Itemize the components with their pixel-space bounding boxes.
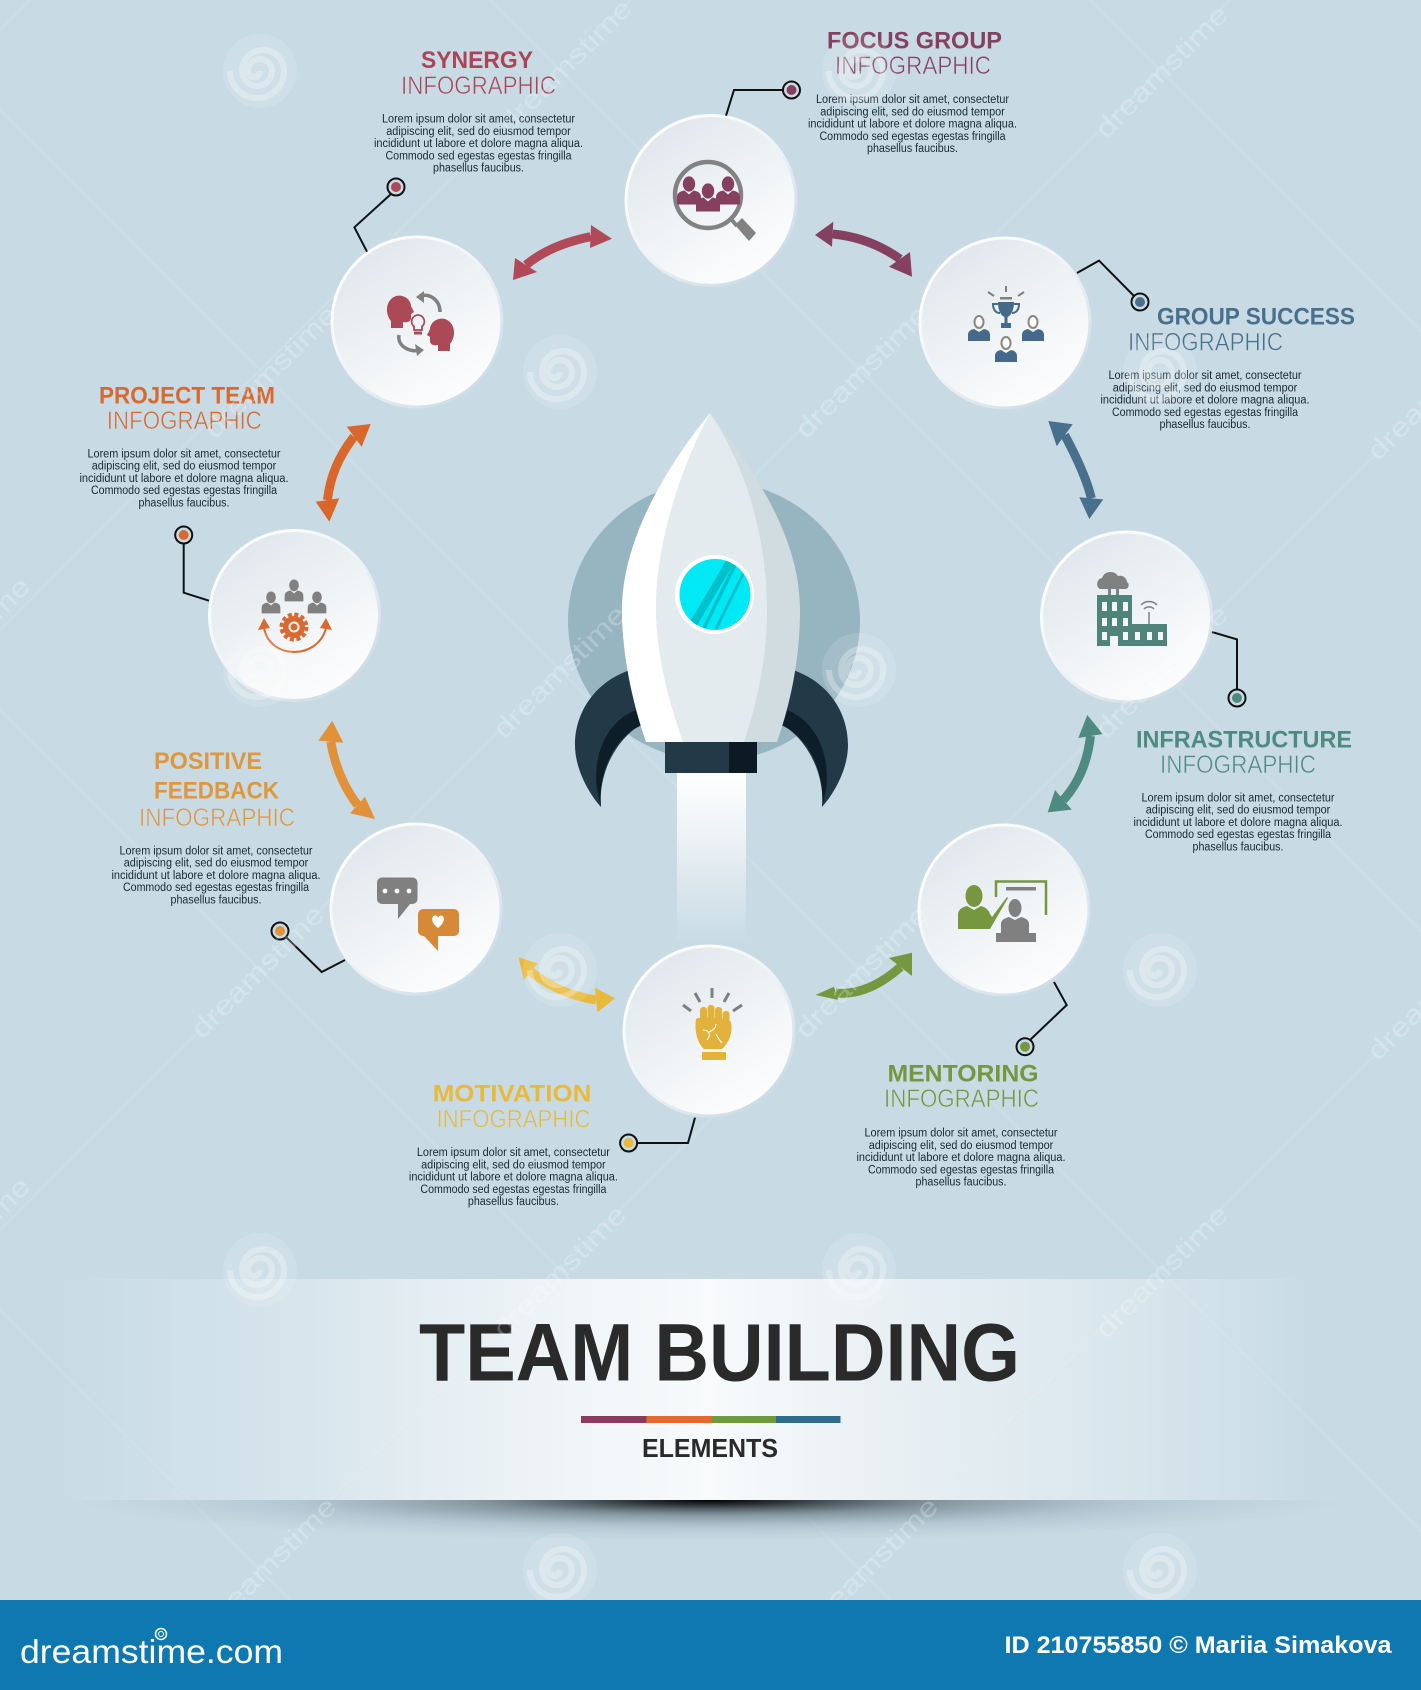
connector: motivation [620, 1118, 695, 1152]
body text: focus group: adipiscing elit, sed do eiusmod tempor [820, 106, 1005, 118]
body text: focus group: Lorem ipsum dolor sit amet, consectetur [816, 94, 1009, 106]
footer logo: dreamstime.com [20, 1633, 283, 1670]
heading: synergy: SYNERGY [421, 47, 533, 74]
connector: infrastructure [1212, 632, 1246, 706]
footer credit: ID 210755850 © Mariia Simakova [1004, 1632, 1392, 1659]
circle: focus group [624, 114, 798, 287]
watermark overlay: dreamstime [493, 0, 638, 138]
text block: positive feedback [112, 748, 320, 906]
footer bar [0, 1600, 1421, 1690]
connector: project team [175, 526, 209, 601]
body text: project team: Commodo sed egestas egestas fringilla [91, 485, 278, 497]
icon: heads and bulb [387, 291, 454, 356]
heading: positive feedback [154, 748, 280, 805]
connector: synergy [354, 178, 404, 252]
left fin [575, 670, 645, 807]
right fin [778, 670, 848, 807]
watermark overlay: dreamstime [197, 1491, 342, 1636]
watermark overlay: dreamstime [1089, 1199, 1234, 1344]
heading: infrastructure: INFRASTRUCTURE [1136, 727, 1352, 754]
body text: mentoring: adipiscing elit, sed do eiusmod tempor [869, 1140, 1053, 1152]
body text: mentoring: incididunt ut labore et dolore magna aliqua. [856, 1152, 1066, 1164]
body text: infrastructure [1134, 792, 1342, 853]
heading: mentoring: MENTORING [888, 1061, 1038, 1088]
circle: group success [918, 236, 1092, 410]
arrow: synergy to focus group [513, 225, 612, 280]
colour stripe [581, 1416, 840, 1423]
heading: focus group: FOCUS GROUP [827, 27, 1002, 54]
body text: positive feedback: phasellus faucibus. [170, 894, 262, 906]
body text: infrastructure: adipiscing elit, sed do eiusmod tempor [1146, 805, 1330, 817]
watermark overlay: dreamstime [789, 299, 934, 444]
body text: project team: phasellus faucibus. [138, 497, 230, 509]
subheading: group success: INFOGRAPHIC [1128, 328, 1283, 356]
icon: team and gear [258, 579, 332, 652]
watermark overlay: dreamstime [185, 899, 330, 1044]
body text: motivation: adipiscing elit, sed do eiusmod tempor [421, 1159, 606, 1171]
rocket backdrop circle [568, 481, 860, 761]
rocket nozzle [665, 742, 757, 773]
rocket window [675, 555, 754, 634]
body text: infrastructure: Commodo sed egestas egestas fringilla [1145, 829, 1332, 841]
body text: group success: phasellus faucibus. [1160, 419, 1250, 431]
connector: mentoring [1016, 982, 1067, 1055]
arrow: mentoring to motivation [816, 953, 912, 1000]
circle: project team [208, 529, 381, 702]
body text: project team [80, 448, 288, 509]
circle: positive feedback [330, 822, 502, 996]
text block: mentoring [856, 1061, 1066, 1189]
arrow: positive feedback to project team [318, 721, 375, 819]
subheading: project team: INFOGRAPHIC [107, 407, 262, 435]
subheading: infrastructure: INFOGRAPHIC [1160, 751, 1316, 779]
connector: focus group [726, 82, 800, 116]
subheading: focus group: INFOGRAPHIC [835, 52, 991, 80]
subheading: positive feedback: INFOGRAPHIC [139, 804, 295, 832]
exhaust trail [677, 773, 746, 943]
icon: raised fist [683, 988, 742, 1060]
arrow: project team to synergy [316, 424, 371, 522]
icon: trophy and team [968, 286, 1044, 362]
arrow: infrastructure to mentoring [1048, 715, 1103, 812]
rocket body [622, 413, 800, 742]
body text: group success: adipiscing elit, sed do eiusmod tempor [1113, 382, 1297, 394]
body text: project team: adipiscing elit, sed do eiusmod tempor [92, 461, 276, 473]
panel shadow [70, 1500, 1350, 1542]
icon: mentor and student [958, 882, 1046, 942]
subtitle: ELEMENTS [642, 1433, 778, 1463]
heading: motivation: MOTIVATION [433, 1081, 591, 1108]
title panel [60, 1279, 1350, 1542]
watermark overlay: dreamstime [1089, 0, 1234, 144]
text block: focus group [808, 27, 1017, 155]
subheading: motivation: INFOGRAPHIC [436, 1105, 590, 1133]
subheading: mentoring: INFOGRAPHIC [884, 1085, 1039, 1113]
watermark overlay: dreamstime [799, 1491, 944, 1636]
circle: infrastructure [1040, 530, 1213, 704]
body text: synergy [374, 114, 583, 174]
circle: motivation [622, 944, 796, 1118]
body text: synergy: incididunt ut labore et dolore magna aliqua. [374, 138, 583, 150]
text block: synergy [374, 47, 583, 174]
circle: synergy [330, 236, 504, 408]
title: TEAM BUILDING [419, 1308, 1020, 1399]
arrow: focus group to group success [815, 222, 912, 277]
text block: motivation [409, 1081, 618, 1208]
body text: focus group: incididunt ut labore et dolore magna aliqua. [808, 118, 1017, 130]
icon: building with cloud and wifi [1097, 572, 1167, 646]
watermark overlay: dreamstime [487, 599, 632, 744]
connector: group success [1077, 261, 1148, 310]
body text: positive feedback: Commodo sed egestas egestas fringilla [123, 882, 310, 894]
rocket illustration [568, 413, 860, 943]
text block: project team [80, 382, 288, 509]
body text: synergy: adipiscing elit, sed do eiusmod tempor [386, 126, 571, 138]
body text: mentoring: Commodo sed egestas egestas fringilla [868, 1164, 1055, 1176]
circle: mentoring [918, 824, 1090, 996]
text block: group success [1100, 304, 1355, 431]
body text: motivation: Commodo sed egestas egestas fringilla [420, 1184, 607, 1196]
body text: positive feedback [112, 845, 320, 906]
arrow: group success to infrastructure [1048, 421, 1103, 519]
body text: synergy: phasellus faucibus. [433, 162, 524, 174]
body text: focus group: Commodo sed egestas egestas fringilla [820, 131, 1006, 143]
body text: synergy: Commodo sed egestas egestas fringilla [386, 150, 572, 162]
body text: motivation: incididunt ut labore et dolore magna aliqua. [409, 1172, 618, 1184]
body text: focus group [808, 94, 1017, 155]
body text: group success: Lorem ipsum dolor sit amet, consectetur [1108, 370, 1302, 382]
body text: positive feedback: adipiscing elit, sed do eiusmod tempor [124, 858, 308, 870]
text block: infrastructure [1134, 727, 1352, 853]
body text: mentoring: phasellus faucibus. [916, 1177, 1006, 1189]
icon: magnifier with people [675, 162, 756, 241]
arrow: motivation to positive feedback [518, 957, 615, 1012]
watermark overlay: dreamstime [1089, 599, 1234, 744]
watermark overlay: dreamstime [487, 1199, 632, 1344]
body text: group success: Commodo sed egestas egestas fringilla [1112, 407, 1299, 419]
heading: positive feedback: POSITIVE [154, 748, 262, 775]
body text: infrastructure: phasellus faucibus. [1192, 841, 1284, 853]
body text: positive feedback: Lorem ipsum dolor sit amet, consectetur [120, 845, 313, 857]
body text: project team: Lorem ipsum dolor sit amet, consectetur [88, 448, 281, 460]
body text: motivation: Lorem ipsum dolor sit amet, consectetur [417, 1147, 610, 1159]
heading: positive feedback: FEEDBACK [154, 778, 280, 805]
heading: project team: PROJECT TEAM [99, 382, 275, 409]
body text: group success: incididunt ut labore et dolore magna aliqua. [1100, 394, 1310, 406]
icon: speech bubbles [377, 878, 459, 951]
body text: infrastructure: Lorem ipsum dolor sit amet, consectetur [1142, 792, 1335, 804]
body text: synergy: Lorem ipsum dolor sit amet, consectetur [382, 114, 575, 126]
body text: mentoring: Lorem ipsum dolor sit amet, consectetur [864, 1128, 1058, 1140]
body text: focus group: phasellus faucibus. [867, 143, 958, 155]
watermark overlay: dreamstime [789, 899, 934, 1044]
body text: group success [1100, 370, 1310, 431]
watermark overlay: dreamstime [198, 299, 343, 444]
subheading: synergy: INFOGRAPHIC [401, 72, 556, 100]
body text: project team: incididunt ut labore et dolore magna aliqua. [80, 473, 288, 485]
body text: infrastructure: incididunt ut labore et dolore magna aliqua. [1134, 817, 1342, 829]
connector: positive feedback [272, 922, 345, 972]
body text: motivation: phasellus faucibus. [468, 1196, 559, 1208]
heading: group success: GROUP SUCCESS [1157, 304, 1355, 331]
body text: mentoring [856, 1128, 1066, 1189]
body text: positive feedback: incididunt ut labore et dolore magna aliqua. [112, 870, 320, 882]
body text: motivation [409, 1147, 618, 1208]
